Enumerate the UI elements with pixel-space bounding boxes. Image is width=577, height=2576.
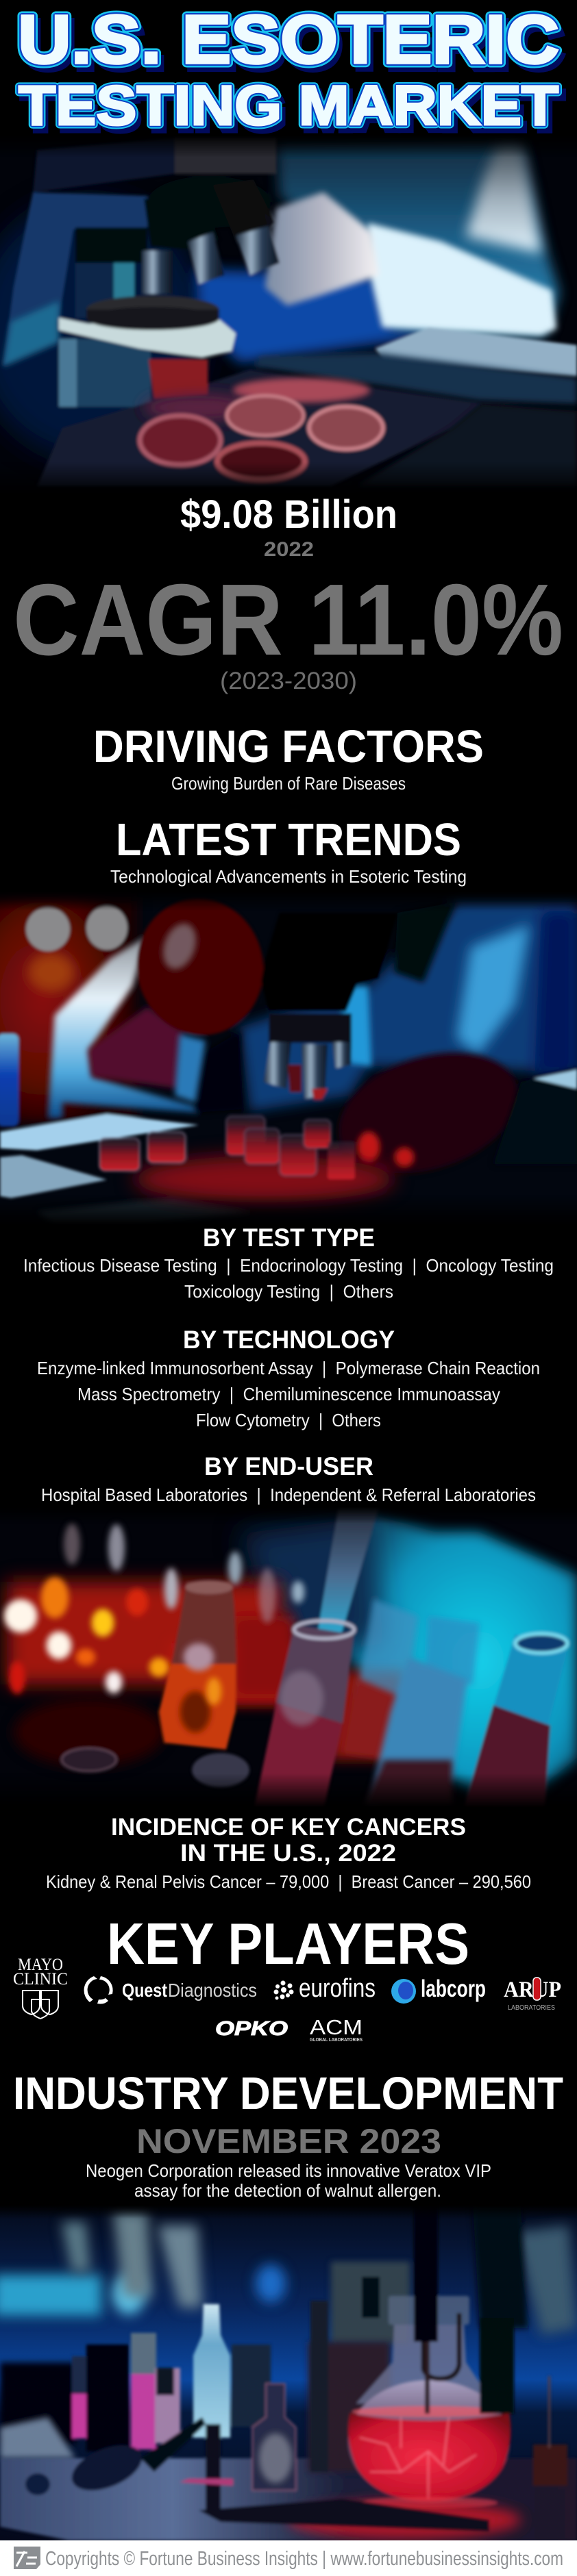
orange bottle xyxy=(159,1580,236,1750)
logo: eurofins xyxy=(274,1974,376,2003)
logo: labcorp xyxy=(391,1975,486,2004)
forecast period: (2023-2030) xyxy=(220,668,357,694)
section: by end-user xyxy=(41,1452,536,1505)
logo: ARUP Laboratories: ARUP xyxy=(504,1978,561,2002)
grey ovals xyxy=(26,906,127,951)
technology line 1: Enzyme-linked Immunosorbent Assay | Polymerase Chain Reaction xyxy=(37,1358,540,1378)
date: NOVEMBER 2023 xyxy=(136,2122,441,2160)
technology line 3: Flow Cytometry | Others xyxy=(196,1410,381,1430)
heading: incidence of key cancers: INCIDENCE OF KEY CANCERS xyxy=(111,1814,466,1841)
logo: Fortune Business Insights xyxy=(14,2547,40,2569)
support rod xyxy=(414,2205,459,2414)
gloved hand xyxy=(136,898,266,1037)
logo: labcorp: labcorp xyxy=(421,1975,486,2002)
bottles group xyxy=(72,2304,296,2490)
image: glass bottles with red and blue lighting xyxy=(0,1506,577,1808)
test types line 2: Toxicology Testing | Others xyxy=(184,1281,393,1302)
driving factors text: Growing Burden of Rare Diseases xyxy=(171,773,406,794)
section: by technology xyxy=(37,1326,540,1430)
microscope head xyxy=(33,138,276,192)
title: U.S. ESOTERIC xyxy=(22,7,563,84)
logo: ACM Global Laboratories: GLOBAL LABORATORIES xyxy=(310,2038,363,2043)
lab plates xyxy=(0,1114,254,1226)
logo: Mayo Clinic: MAYO xyxy=(18,1956,63,1974)
objective lenses xyxy=(142,226,280,294)
microscope body xyxy=(3,192,151,407)
centre bottle xyxy=(254,1621,354,1808)
red vial xyxy=(149,359,208,399)
title: U.S. ESOTERIC xyxy=(18,1,559,78)
title: TESTING MARKET xyxy=(19,75,558,137)
development text: assay for the detection of walnut allergen. xyxy=(134,2180,441,2201)
right-side stand xyxy=(480,2318,567,2486)
petri dishes xyxy=(140,378,383,480)
logo: ARUP Laboratories xyxy=(504,1978,561,2012)
section: by test type xyxy=(23,1224,554,1302)
logo: eurofins: eurofins xyxy=(299,1974,376,2003)
logo: Quest Diagnostics xyxy=(84,1976,257,2004)
image: laboratory bottles and red flask xyxy=(0,2205,577,2540)
title: TESTING MARKET xyxy=(22,80,563,142)
image: microscope and technician xyxy=(0,134,577,496)
apparatus behind flask xyxy=(308,2262,410,2472)
title: TESTING MARKET xyxy=(19,75,558,137)
logo: Mayo Clinic xyxy=(13,1956,68,2019)
heading: by technology: BY TECHNOLOGY xyxy=(183,1326,395,1354)
heading: by test type: BY TEST TYPE xyxy=(203,1224,375,1252)
table surface xyxy=(0,2458,577,2540)
title: U.S. ESOTERIC xyxy=(18,1,559,78)
table reflection xyxy=(288,2501,521,2539)
microscope head xyxy=(261,913,397,1011)
right glass bottles xyxy=(343,1599,567,1808)
blue bottle xyxy=(0,1034,19,1126)
footer bar xyxy=(0,2540,577,2576)
objectives xyxy=(264,1042,352,1100)
image: technician at microscope with red vials xyxy=(0,887,577,1226)
end-users: Hospital Based Laboratories | Independent & Referral Laboratories xyxy=(41,1485,536,1505)
cancer figures: Kidney & Renal Pelvis Cancer – 79,000 | Breast Cancer – 290,560 xyxy=(46,1871,531,1892)
heading: by end-user: BY END-USER xyxy=(204,1452,373,1480)
pouring stream xyxy=(316,1510,378,1634)
logo: Quest Diagnostics: Diagnostics xyxy=(168,1980,257,2001)
flask xyxy=(348,2296,511,2508)
heading: driving factors: DRIVING FACTORS xyxy=(93,721,484,772)
section: cancer incidence: IN THE U.S., 2022 xyxy=(180,1840,396,1867)
section: cancer incidence xyxy=(46,1814,531,1892)
stethoscope xyxy=(25,2417,233,2513)
logo: OPKO: OPKO xyxy=(215,2018,288,2040)
logo: ACM Global Laboratories: ACM xyxy=(310,2015,363,2039)
base year: 2022 xyxy=(264,538,314,561)
market size: $9.08 Billion xyxy=(180,492,397,537)
logo: Mayo Clinic: CLINIC xyxy=(13,1970,68,1988)
latest trends text: Technological Advancements in Esoteric Testing xyxy=(110,866,467,887)
title: U.S. ESOTERIC xyxy=(18,1,559,78)
logo: Quest Diagnostics: Quest xyxy=(122,1980,167,2001)
test types line 1: Infectious Disease Testing | Endocrinology Testing | Oncology Testing xyxy=(23,1255,554,1276)
heading: key players: KEY PLAYERS xyxy=(107,1912,469,1977)
right hand xyxy=(337,1047,519,1175)
red glow on table xyxy=(134,1156,394,1202)
title: TESTING MARKET xyxy=(19,75,558,137)
technology line 2: Mass Spectrometry | Chemiluminescence Immunoassay xyxy=(77,1384,500,1404)
development text: Neogen Corporation released its innovative Veratox VIP xyxy=(86,2160,491,2181)
development text xyxy=(86,2160,491,2201)
logo: ARUP Laboratories: LABORATORIES xyxy=(508,2004,555,2012)
heading: latest trends: LATEST TRENDS xyxy=(116,814,461,866)
title xyxy=(18,1,563,142)
bokeh lights xyxy=(4,1524,304,1694)
red vials xyxy=(99,1116,355,1179)
tool on table xyxy=(199,2499,489,2531)
